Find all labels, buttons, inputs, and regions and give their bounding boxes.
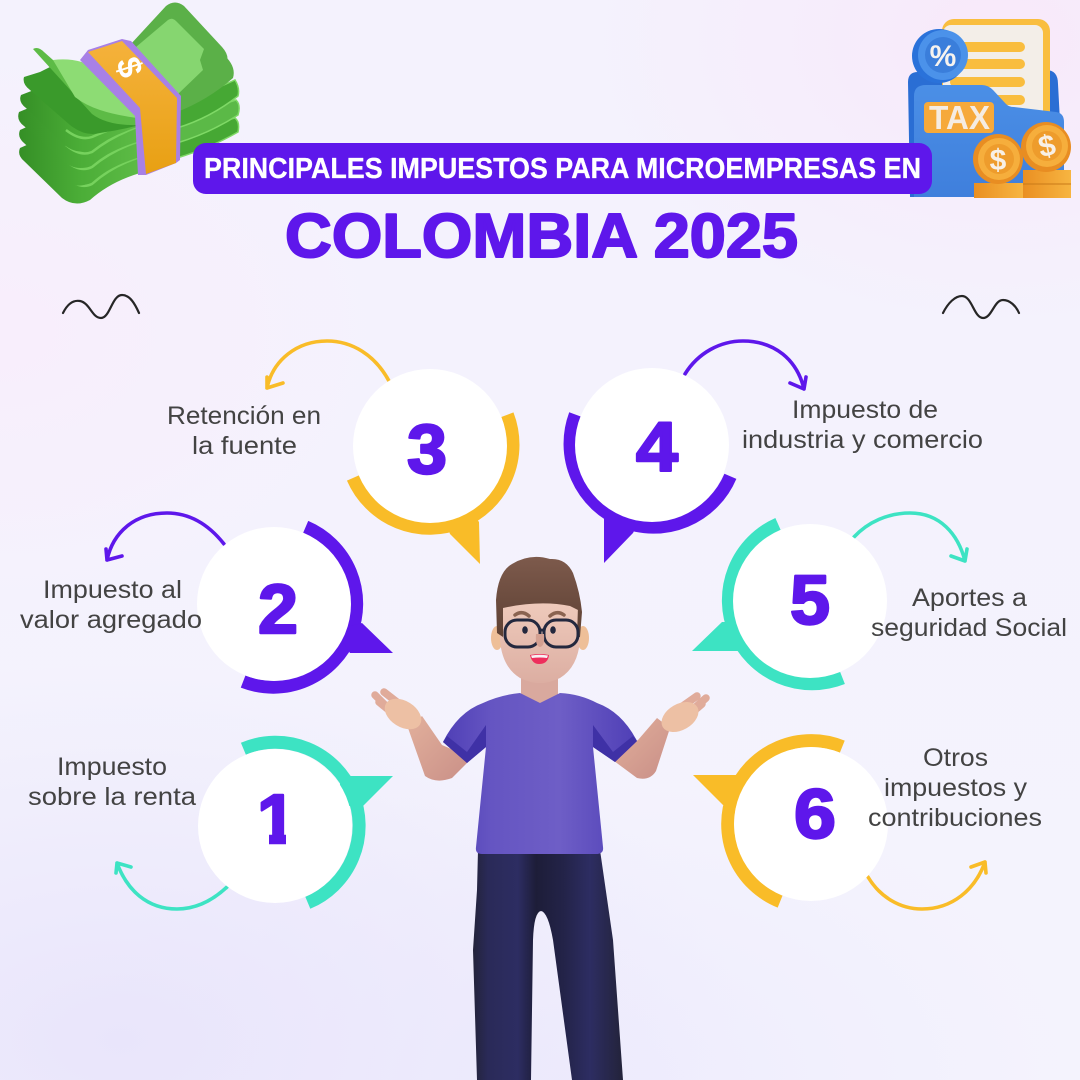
item 5: aportes a seguridad social [692, 513, 1067, 684]
coin stacks [973, 122, 1071, 198]
arrow 4 [685, 341, 806, 389]
label 6: Otros [923, 744, 988, 772]
front left flap [33, 48, 138, 125]
label 1 [28, 753, 196, 811]
label 4 [742, 396, 983, 454]
percent badge [912, 29, 968, 83]
label 5: Aportes a [912, 584, 1027, 612]
circle 3 [353, 369, 507, 523]
circle 2 [197, 527, 351, 681]
ring 4 [570, 414, 730, 527]
number 4: 4 [636, 408, 678, 486]
paper band [80, 39, 181, 175]
shirt [443, 693, 637, 854]
arrow 6 [868, 862, 986, 909]
ring 2 [243, 527, 357, 687]
item 3: retencion en la fuente [167, 341, 513, 564]
nose [536, 634, 544, 647]
arrow 1 [116, 863, 227, 909]
folder front [914, 85, 1064, 197]
label 3 [167, 402, 321, 460]
arrow 2 [106, 513, 224, 560]
tax label: TAX [929, 99, 990, 136]
dollar sign on band: $ [108, 52, 150, 82]
right stripes [177, 118, 239, 158]
item 2: impuesto al valor agregado [20, 513, 393, 687]
face [499, 600, 580, 683]
number 5: 5 [790, 561, 830, 639]
label 2 [20, 576, 202, 634]
illustration: tax folder with coins [908, 19, 1071, 198]
main title: COLOMBIA 2025 [285, 202, 798, 271]
label 6 [868, 744, 1042, 832]
sleeve shadows [443, 725, 637, 763]
glasses [505, 620, 578, 647]
back flap [130, 2, 228, 112]
left stripes [19, 130, 140, 204]
item 6: otros impuestos y contribuciones [693, 741, 1042, 909]
number 2: 2 [258, 570, 298, 648]
label 5 [871, 584, 1067, 642]
illustration: stack of green banknotes [18, 2, 239, 204]
item 4: impuesto de industria y comercio [570, 341, 983, 563]
label 3: la fuente [192, 432, 297, 460]
pointer 6 [693, 775, 750, 805]
ring 3 [353, 415, 513, 528]
arrow 3 [267, 341, 389, 388]
decorative squiggle left [63, 295, 139, 318]
ears [491, 626, 589, 650]
pants [473, 850, 623, 1080]
pointer 4 [604, 510, 640, 563]
label 6: contribuciones [868, 804, 1042, 832]
circle 4 [575, 368, 729, 522]
label 2: valor agregado [20, 606, 202, 634]
label 3: Retención en [167, 402, 321, 430]
mouth [530, 654, 549, 664]
pointer 2 [335, 623, 393, 653]
label 5: seguridad Social [871, 614, 1067, 642]
item 1: impuesto sobre la renta [28, 742, 393, 909]
hair [496, 557, 582, 637]
circle 6 [734, 747, 888, 901]
folder back [908, 70, 1064, 197]
pointer 1 [340, 776, 393, 806]
percent badge: % [930, 40, 956, 73]
document [942, 19, 1050, 129]
pointer 5 [692, 622, 750, 651]
neck [521, 672, 558, 704]
pointer 3 [445, 510, 480, 564]
right arm [610, 718, 670, 779]
ring 5 [728, 524, 842, 684]
eyes [522, 626, 556, 634]
title banner: PRINCIPALES IMPUESTOS PARA MICROEMPRESAS EN [204, 153, 921, 185]
right hand [656, 696, 706, 738]
number 1: 1 [257, 780, 296, 858]
label 6: impuestos y [884, 774, 1028, 802]
coin stacks: $ [1036, 129, 1059, 164]
number 6: 6 [794, 775, 836, 853]
eyebrows [515, 613, 564, 616]
ring 1 [243, 742, 359, 903]
label 2: Impuesto al [43, 576, 182, 604]
decorative squiggle right [943, 296, 1019, 318]
arrow 5 [854, 513, 967, 561]
circle 5 [733, 524, 887, 678]
number 3: 3 [407, 410, 447, 488]
ring 6 [728, 741, 842, 902]
label 4: Impuesto de [792, 396, 938, 424]
label 1: Impuesto [57, 753, 167, 781]
coin stacks: $ [990, 144, 1007, 177]
left hand [375, 692, 427, 736]
circle 1 [198, 749, 352, 903]
label 4: industria y comercio [742, 426, 983, 454]
title banner [193, 143, 932, 194]
illustration: 3D man shrugging with glasses [375, 557, 706, 1080]
label 1: sobre la renta [28, 783, 196, 811]
left arm [408, 716, 472, 781]
